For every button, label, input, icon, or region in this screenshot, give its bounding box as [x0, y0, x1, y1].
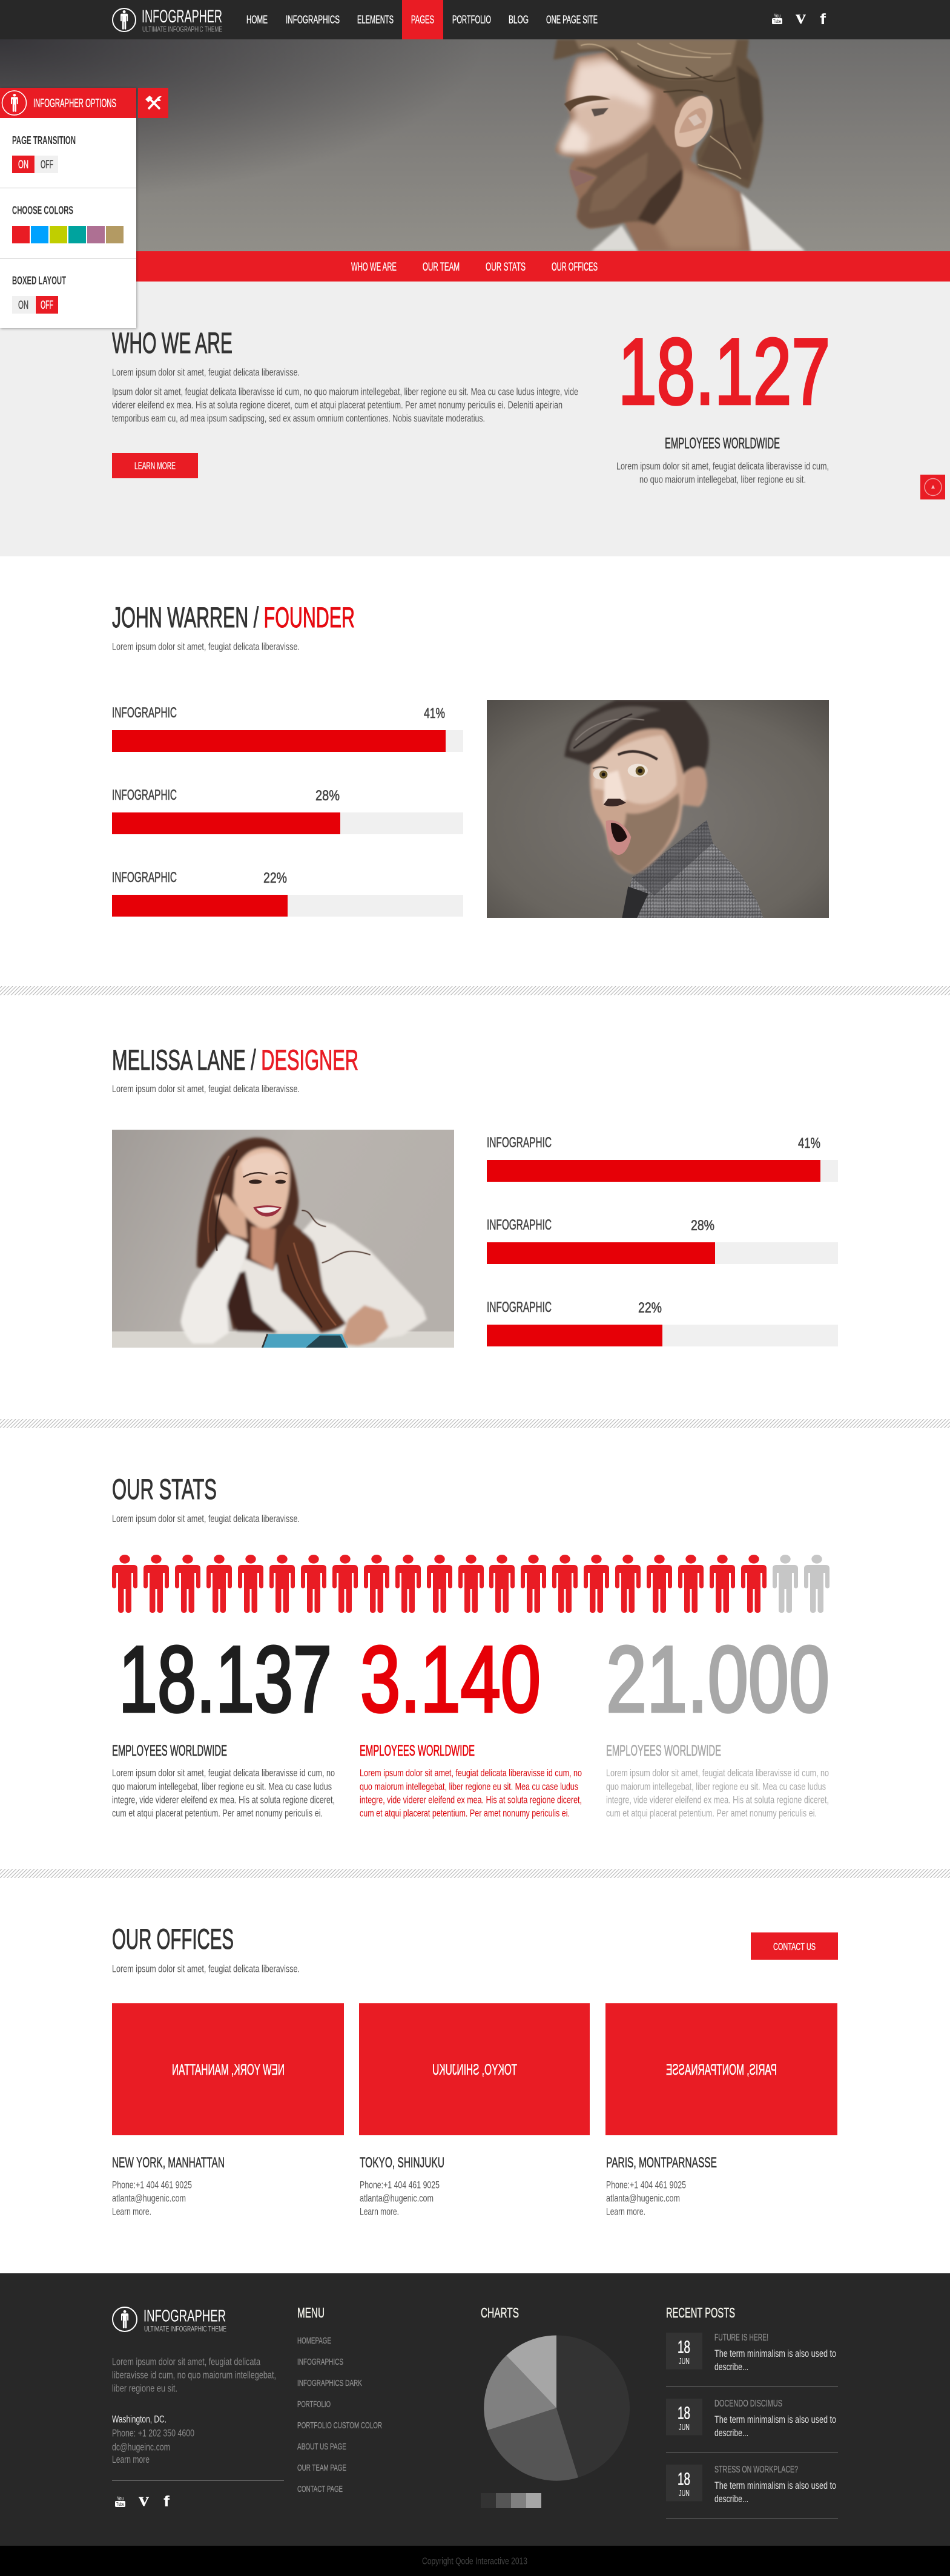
- footer menu: INFOGRAPHICS DARK: [297, 2378, 362, 2388]
- learn more button: LEARN MORE: [134, 460, 176, 472]
- body paragraph: viderer eleifend ex mea. His at soluta regione diceret, cum et atqui placerat petentium. Per amet nonumy periculis ei. Deleniti apeirian: [112, 400, 562, 411]
- sub navigation red bar: OUR OFFICES: [552, 261, 598, 274]
- panel: john warren founder: [112, 601, 829, 918]
- stat column 2: EMPLOYEES WORLDWIDE: [360, 1742, 475, 1759]
- photo: surprised man: [487, 700, 829, 918]
- progress bar 22%: 22%: [263, 870, 287, 886]
- option: choose colors: CHOOSE COLORS: [12, 205, 73, 217]
- main menu: BLOG: [509, 13, 529, 25]
- main menu: ONE PAGE SITE: [546, 13, 598, 25]
- option: boxed layout: OFF: [41, 299, 53, 312]
- progress bar 41%: [112, 705, 463, 752]
- office card: tokyo: TOKYO, SHINJUKU: [432, 2061, 517, 2078]
- progress bar 41%: 41%: [424, 705, 445, 722]
- main menu: [246, 13, 598, 25]
- progress bar 22%: 22%: [638, 1300, 662, 1316]
- footer contact details: [112, 2414, 194, 2465]
- post 2: The term minimalism is also used to: [714, 2414, 836, 2425]
- recent posts: RECENT POSTS: [666, 2305, 735, 2321]
- post 1: FUTURE IS HERE!: [714, 2333, 768, 2343]
- office card: paris: atlanta@hugenic.com: [606, 2193, 680, 2204]
- social icons: f: [820, 11, 826, 28]
- footer logo: [113, 2307, 226, 2333]
- footer contact details: Washington, DC.: [112, 2414, 167, 2425]
- post 1: JUN: [679, 2356, 690, 2367]
- stat column 1: integre, vide viderer eleifend ex mea. His at soluta regione diceret,: [112, 1794, 335, 1806]
- footer about text: [112, 2356, 276, 2394]
- footer about text: liber regione eu sit.: [112, 2383, 177, 2394]
- main menu: ELEMENTS: [357, 13, 394, 25]
- panel: who we are: [0, 282, 950, 556]
- progress bar 41%: INFOGRAPHIC: [487, 1135, 552, 1151]
- top navigation bar: [0, 0, 950, 39]
- pictogram: row of people: [112, 1555, 830, 1613]
- progress bar 28%: [112, 787, 463, 834]
- chart legend: [481, 2493, 541, 2508]
- heading: who we are: WHO WE ARE: [112, 328, 233, 360]
- body paragraph: [112, 386, 578, 424]
- footer menu: [297, 2305, 382, 2494]
- main menu: HOME: [246, 13, 268, 25]
- progress bar 41%: 41%: [798, 1135, 820, 1151]
- hatched divider: [0, 1869, 950, 1878]
- body paragraph: temporibus eam cu, ad mea ipsum sadipscing, sed ex assum omnium contentiones. Nobis suavitate moderatius.: [112, 413, 485, 424]
- post 3: 18: [678, 2470, 690, 2489]
- intro text: Lorem ipsum dolor sit amet, feugiat delicata liberavisse.: [112, 1083, 300, 1095]
- social icons: v: [796, 6, 806, 28]
- option: boxed layout: [12, 275, 66, 314]
- footer logo: INFOGRAPHER: [143, 2307, 226, 2325]
- footer menu: PORTFOLIO: [297, 2399, 331, 2410]
- stat column 1: EMPLOYEES WORLDWIDE: [112, 1742, 227, 1759]
- heading: our stats: OUR STATS: [112, 1473, 217, 1505]
- panel: melissa lane designer: [112, 1044, 838, 1348]
- option: page transition: ON: [18, 159, 28, 171]
- stat column 3: cum et atqui placerat petentium. Per amet nonumy periculis ei.: [606, 1807, 817, 1819]
- hatched divider: [0, 986, 950, 995]
- post 1: [666, 2333, 838, 2387]
- options header: INFOGRAPHER OPTIONS: [33, 97, 116, 110]
- label: employees worldwide: EMPLOYEES WORLDWIDE: [665, 435, 780, 452]
- progress bar 28%: INFOGRAPHIC: [112, 787, 177, 803]
- office card: tokyo: Learn more.: [360, 2206, 399, 2218]
- progress bar 22%: [487, 1299, 838, 1346]
- copyright bar: Copyright Qode Interactive 2013: [422, 2557, 527, 2567]
- big number 3.140: 3.140: [360, 1627, 541, 1731]
- option: choose colors: [12, 205, 124, 243]
- post 1: The term minimalism is also used to: [714, 2348, 836, 2359]
- panel: our offices: [112, 1923, 838, 2218]
- post 3: describe...: [714, 2493, 748, 2505]
- footer menu: CONTACT PAGE: [297, 2484, 343, 2494]
- post 2: describe...: [714, 2427, 748, 2439]
- heading: our offices: OUR OFFICES: [112, 1923, 234, 1955]
- footer menu: OUR TEAM PAGE: [297, 2463, 346, 2473]
- logo: person in circle: ULTIMATE INFOGRAPHIC THEME: [142, 24, 222, 34]
- footer charts: [481, 2305, 630, 2508]
- office card: new york: Phone:+1 404 461 9025: [112, 2179, 192, 2191]
- footer about text: Lorem ipsum dolor sit amet, feugiat delicata: [112, 2356, 260, 2368]
- social icons: Tube: [773, 19, 781, 24]
- progress bar 22%: INFOGRAPHIC: [112, 869, 177, 886]
- footer charts: CHARTS: [481, 2305, 519, 2321]
- big number 21.000: 21.000: [606, 1627, 830, 1731]
- panel: footer: [0, 2273, 950, 2546]
- office card: tokyo: Phone:+1 404 461 9025: [360, 2179, 440, 2191]
- post 1: 18: [678, 2338, 690, 2357]
- intro text: Lorem ipsum dolor sit amet, feugiat delicata liberavisse.: [112, 1513, 300, 1524]
- progress bar 28%: 28%: [691, 1217, 714, 1234]
- stat column 3: [606, 1742, 829, 1819]
- progress bar 28%: INFOGRAPHIC: [487, 1217, 552, 1233]
- logo: person in circle: INFOGRAPHER: [142, 7, 222, 27]
- options header: [0, 88, 136, 118]
- stat column 3: EMPLOYEES WORLDWIDE: [606, 1742, 721, 1759]
- heading: john warren / founder: JOHN WARREN / FOUNDER: [112, 601, 355, 633]
- progress bar 28%: [487, 1217, 838, 1264]
- intro text: Lorem ipsum dolor sit amet, feugiat delicata liberavisse.: [112, 367, 300, 378]
- learn more button: [112, 453, 198, 478]
- employees description: no quo maiorum intellegebat, liber regione eu sit.: [639, 474, 806, 486]
- sub navigation red bar: WHO WE ARE: [351, 261, 397, 274]
- main menu: PAGES: [411, 13, 434, 25]
- stat column 2: integre, vide viderer eleifend ex mea. His at soluta regione diceret,: [360, 1794, 582, 1806]
- option: page transition: [12, 134, 76, 173]
- option: page transition: OFF: [41, 159, 53, 171]
- sub navigation red bar: OUR TEAM: [423, 261, 460, 274]
- stat column 2: [360, 1742, 582, 1819]
- main menu: PORTFOLIO: [452, 13, 491, 25]
- copyright bar: [0, 2546, 950, 2576]
- post 1: describe...: [714, 2361, 748, 2373]
- intro text: Lorem ipsum dolor sit amet, feugiat delicata liberavisse.: [112, 1963, 300, 1975]
- heading: melissa lane / designer: MELISSA LANE / DESIGNER: [112, 1044, 358, 1076]
- office card: paris: PARIS, MONTPARNASSE: [606, 2155, 717, 2171]
- post 3: STRESS ON WORKPLACE?: [714, 2465, 798, 2475]
- footer contact details: Phone: +1 202 350 4600: [112, 2428, 194, 2439]
- footer menu: ABOUT US PAGE: [297, 2442, 346, 2452]
- big number 18.127: 18.127: [618, 319, 830, 424]
- option: boxed layout: BOXED LAYOUT: [12, 275, 66, 287]
- progress bar 22%: [112, 869, 463, 917]
- post 2: 18: [678, 2403, 690, 2423]
- footer social icons: Tube: [116, 2502, 124, 2507]
- body paragraph: Ipsum dolor sit amet, feugiat delicata liberavisse id cum, no quo maiorum intellegebat, liber regione eu sit. Mea cu case ludus integre, vide: [112, 386, 578, 398]
- footer contact details: dc@hugeinc.com: [112, 2442, 170, 2453]
- scroll to top button: [920, 475, 945, 499]
- stat column 1: cum et atqui placerat petentium. Per amet nonumy periculis ei.: [112, 1807, 323, 1819]
- progress bar 41%: INFOGRAPHIC: [112, 705, 177, 721]
- social icons: You: [774, 13, 780, 19]
- social icons: [772, 6, 826, 28]
- office card: paris: Phone:+1 404 461 9025: [606, 2179, 686, 2191]
- pie chart: [484, 2335, 630, 2481]
- main menu: INFOGRAPHICS: [286, 13, 340, 25]
- footer menu: PORTFOLIO CUSTOM COLOR: [297, 2420, 382, 2431]
- employees description: [616, 461, 829, 486]
- office card: new york: Learn more.: [112, 2206, 151, 2218]
- post 2: JUN: [679, 2422, 690, 2433]
- footer menu: INFOGRAPHICS: [297, 2357, 343, 2367]
- recent posts: [666, 2305, 838, 2518]
- stat column 3: quo maiorum intellegebat, liber regione eu sit. Mea cu case ludus: [606, 1781, 826, 1793]
- logo: person in circle: [113, 7, 222, 34]
- sub navigation red bar: [0, 251, 950, 282]
- contact us button: [751, 1932, 838, 1960]
- footer social icons: f: [163, 2493, 170, 2510]
- progress bar 22%: INFOGRAPHIC: [487, 1299, 552, 1316]
- panel: infographer options: [0, 88, 168, 328]
- office card: paris: Learn more.: [606, 2206, 645, 2218]
- post 3: [666, 2465, 838, 2518]
- office card: new york: atlanta@hugenic.com: [112, 2193, 186, 2204]
- footer menu: HOMEPAGE: [297, 2336, 331, 2346]
- post 3: The term minimalism is also used to: [714, 2480, 836, 2491]
- stat column 2: quo maiorum intellegebat, liber regione eu sit. Mea cu case ludus: [360, 1781, 578, 1793]
- hatched divider: [0, 1419, 950, 1428]
- sub navigation red bar: OUR STATS: [486, 261, 526, 274]
- post 2: [666, 2399, 838, 2452]
- office card: tokyo: atlanta@hugenic.com: [360, 2193, 434, 2204]
- footer social icons: You: [117, 2495, 124, 2502]
- photo: smiling woman: [112, 1130, 454, 1348]
- option: page transition: PAGE TRANSITION: [12, 134, 76, 147]
- stat column 2: Lorem ipsum dolor sit amet, feugiat delicata liberavisse id cum, no: [360, 1767, 582, 1779]
- intro text: Lorem ipsum dolor sit amet, feugiat delicata liberavisse.: [112, 641, 300, 653]
- office card: tokyo: TOKYO, SHINJUKU: [360, 2155, 444, 2171]
- panel: our stats: [112, 1473, 830, 1819]
- employees description: Lorem ipsum dolor sit amet, feugiat delicata liberavisse id cum,: [616, 461, 829, 472]
- footer contact details: Learn more: [112, 2454, 150, 2465]
- stat column 1: quo maiorum intellegebat, liber regione eu sit. Mea cu case ludus: [112, 1781, 332, 1793]
- stat column 2: cum et atqui placerat petentium. Per amet nonumy periculis ei.: [360, 1807, 570, 1819]
- icon: tools toggle button: [138, 88, 168, 118]
- office card: tokyo: [359, 2003, 590, 2218]
- hero photo: man in profile: [0, 39, 950, 251]
- stat column 1: Lorem ipsum dolor sit amet, feugiat delicata liberavisse id cum, no: [112, 1767, 335, 1779]
- post 3: JUN: [679, 2488, 690, 2499]
- footer about text: liberavisse id cum, no quo maiorum intellegebat,: [112, 2370, 276, 2381]
- office card: new york: [112, 2003, 344, 2218]
- progress bar 41%: [487, 1135, 838, 1182]
- footer menu: MENU: [297, 2305, 325, 2321]
- office card: new york: NEW YORK, MANHATTAN: [112, 2155, 225, 2171]
- option: boxed layout: ON: [18, 299, 28, 312]
- progress bar 28%: 28%: [315, 788, 340, 804]
- footer social icons: v: [139, 2488, 149, 2510]
- post 2: DOCENDO DISCIMUS: [714, 2399, 782, 2409]
- big number 18.137: 18.137: [119, 1627, 332, 1731]
- stat column 1: [112, 1742, 335, 1819]
- contact us button: CONTACT US: [773, 1941, 816, 1952]
- stat column 3: Lorem ipsum dolor sit amet, feugiat delicata liberavisse id cum, no: [606, 1767, 829, 1779]
- stat column 3: integre, vide viderer eleifend ex mea. His at soluta regione diceret,: [606, 1794, 829, 1806]
- footer logo: ULTIMATE INFOGRAPHIC THEME: [144, 2324, 226, 2333]
- footer social icons: [115, 2488, 170, 2510]
- office card: paris: PARIS, MONTPARNASSE: [666, 2061, 777, 2078]
- office card: paris: [605, 2003, 837, 2218]
- office card: new york: NEW YORK, MANHATTAN: [172, 2061, 285, 2078]
